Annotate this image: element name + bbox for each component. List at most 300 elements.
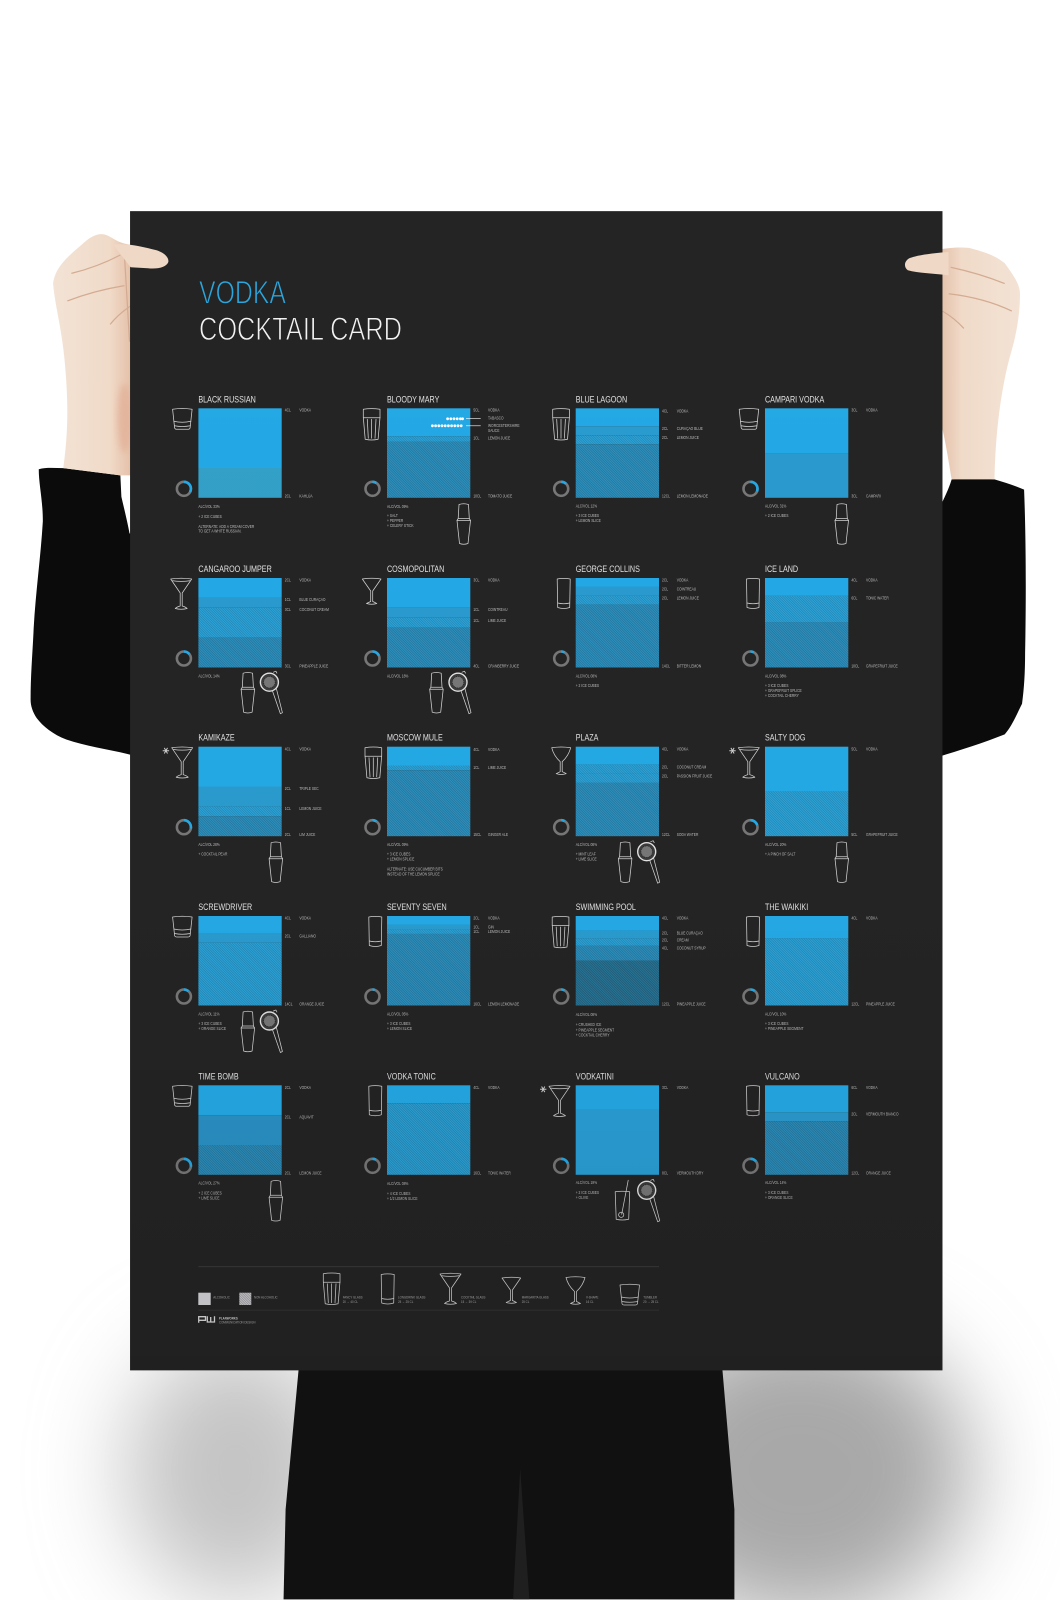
labels and notes: 6CL [851, 1084, 858, 1090]
labels and notes [576, 408, 708, 523]
labels and notes: 4CL [662, 915, 669, 921]
labels and notes: 14CL [285, 1001, 293, 1006]
labels and notes: CURAÇAO BLUE [677, 425, 703, 431]
labels and notes: 2CL [285, 577, 291, 582]
stacked chart [765, 916, 848, 1006]
labels and notes: 2CL [662, 937, 669, 943]
icon: cocktail glass [549, 1086, 570, 1117]
labels and notes: ALC/VOL 09% [387, 504, 409, 509]
labels and notes [576, 746, 712, 862]
labels and notes: VODKA [866, 746, 878, 751]
labels and notes [765, 746, 898, 857]
labels and notes: + 2 ICE CUBES [198, 1190, 222, 1195]
labels and notes: 4CL [473, 746, 480, 752]
labels and notes: ALTERNATE: ADD A CREAM COVER [198, 523, 254, 529]
left hand [53, 234, 135, 475]
labels and notes: VODKA [866, 577, 878, 582]
labels and notes: + 3 ICE CUBES [576, 513, 599, 518]
labels and notes: PINEAPPLE JUICE [677, 1001, 706, 1006]
labels and notes: + 3 ICE CUBES [765, 682, 789, 688]
labels and notes: LEMON JUICE [488, 928, 511, 934]
labels and notes: 4CL [662, 408, 669, 414]
card: Black Russian [173, 394, 313, 534]
labels and notes: TABASCO [488, 415, 504, 421]
labels and notes: 14CL [662, 663, 671, 668]
labels and notes: 12CL [662, 1001, 671, 1006]
labels and notes: LEMON JUICE [677, 435, 699, 440]
labels and notes: 12CL [851, 1170, 860, 1176]
alcohol ring [744, 820, 758, 834]
labels and notes: 2CL [285, 933, 291, 938]
labels and notes: LEMON LEMONADE [677, 493, 708, 499]
icon: longdrink glass [746, 578, 760, 608]
labels and notes: ALC/VOL 10% [765, 1011, 787, 1016]
icon: tumbler [173, 409, 192, 429]
labels and notes: 2CL [662, 595, 669, 600]
icon: fancy glass [363, 409, 380, 440]
card: Vodka Tonic [366, 1071, 511, 1201]
labels and notes: 10CL [473, 493, 482, 499]
labels and notes: 4CL [285, 915, 291, 921]
card: Plaza: PLAZA [576, 733, 599, 743]
labels and notes: 2CL [662, 586, 669, 591]
labels and notes: ALC/VOL 08% [387, 1181, 409, 1186]
alcohol ring [554, 820, 568, 834]
legend: v-shape glass: 16 CL [586, 1300, 594, 1304]
card: The Waikiki [744, 902, 895, 1031]
labels and notes: ALC/VOL 12% [576, 503, 597, 509]
logo: COMMUNICATION DESIGN [219, 1320, 256, 1325]
icon: fancy glass [552, 916, 569, 948]
labels and notes: 12CL [662, 831, 671, 837]
stacked chart [765, 578, 848, 668]
stacked chart [765, 408, 848, 498]
labels and notes: PINEAPPLE JUICE [866, 1001, 895, 1006]
labels and notes: ALTERNATE: USE CUCUMBER BITS [387, 866, 443, 872]
labels and notes: VODKA [488, 577, 500, 582]
card: Ice Land [744, 564, 898, 698]
labels and notes: ALC/VOL 28% [198, 841, 220, 847]
labels and notes: COCONUT CREAM [299, 606, 329, 612]
stacked chart [576, 408, 659, 498]
labels and notes: ORANGE JUICE [299, 1001, 324, 1006]
labels and notes: 2CL [285, 785, 291, 791]
labels and notes: + 3 ICE CUBES [198, 1020, 222, 1026]
legend: fancy glass [323, 1273, 363, 1304]
labels and notes: VERMOUTH BIANCO [866, 1111, 899, 1117]
legend: fancy glass: FANCY GLASS [343, 1295, 363, 1300]
labels and notes: + ORANGE SLICE [198, 1025, 226, 1031]
icon: mixing glass and spoon [615, 1180, 630, 1220]
labels and notes: 8CL [662, 1170, 669, 1176]
labels and notes: 1CL [285, 596, 291, 602]
labels and notes: VODKA [299, 407, 311, 413]
labels and notes: 4CL [285, 407, 291, 413]
card: Swimming Pool [552, 902, 706, 1038]
labels and notes: ALC/VOL 08% [765, 673, 787, 678]
legend: alcoholic swatch: ALCOHOLIC [213, 1295, 230, 1300]
labels and notes: VODKA [866, 915, 878, 921]
labels and notes: + PINEAPPLE SEGMENT [765, 1025, 804, 1031]
card: George Collins [554, 564, 701, 688]
stacked chart [198, 578, 282, 668]
labels and notes: VODKA [866, 407, 878, 413]
right sleeve [938, 477, 1026, 757]
labels and notes: GRAPEFRUIT JUICE [866, 831, 898, 837]
labels and notes: VODKA [299, 915, 311, 921]
labels and notes: VODKA [488, 915, 500, 921]
labels and notes: VODKA [299, 577, 311, 582]
labels and notes: 16CL [473, 1001, 482, 1006]
labels and notes: ALC/VOL 33% [198, 504, 220, 509]
labels and notes: 1CL [473, 764, 480, 770]
labels and notes: VODKA [677, 746, 689, 751]
icon: snowflake [729, 748, 736, 754]
labels and notes [765, 915, 895, 1031]
labels and notes: 2CL [662, 425, 669, 431]
labels and notes: TONIC WATER [866, 595, 889, 600]
icon: longdrink glass [369, 916, 382, 946]
alcohol ring [554, 990, 568, 1004]
labels and notes: + COCKTAIL PEAR [198, 851, 227, 857]
card: Cosmopolitan: COSMOPOLITAN [387, 564, 444, 574]
labels and notes [387, 407, 520, 528]
labels and notes: VODKA [299, 1084, 311, 1090]
card: Moscow Mule [365, 733, 508, 877]
labels and notes: INSTEAD OF THE LEMON SPLICE [387, 871, 440, 877]
labels and notes: + OLIVE [576, 1194, 589, 1200]
card: Vodka Tonic: VODKA TONIC [387, 1071, 436, 1082]
labels and notes: CAMPARI [866, 493, 881, 499]
labels and notes: + CRUSHED ICE [576, 1021, 602, 1027]
labels and notes: 4CL [285, 746, 291, 751]
title: COCKTAIL CARD [199, 311, 402, 347]
left sleeve [31, 468, 135, 756]
labels and notes: 2CL [662, 764, 669, 769]
icon: tumbler [173, 1086, 192, 1106]
left thumb [113, 244, 168, 269]
labels and notes: PINEAPPLE JUICE [299, 663, 329, 668]
card: Campari Vodka [739, 394, 881, 544]
card: Vulcano [744, 1071, 899, 1200]
labels and notes: ALC/VOL 08% [576, 1011, 597, 1017]
legend: non alcoholic swatch [239, 1293, 278, 1305]
labels and notes: ALC/VOL 19% [576, 1180, 597, 1185]
card: Black Russian: BLACK RUSSIAN [198, 394, 256, 405]
icon: longdrink glass [557, 578, 570, 608]
labels and notes: TO GET A WHITE RUSSIAN. [198, 528, 241, 534]
labels and notes: + PINEAPPLE SEGMENT [576, 1027, 615, 1032]
icon: longdrink glass [746, 1086, 760, 1116]
labels and notes: 2CL [662, 930, 669, 936]
labels and notes: LIM JUICE [299, 831, 316, 837]
labels and notes: 2CL [285, 831, 291, 837]
alcohol ring [177, 652, 191, 666]
labels and notes: VODKA [488, 1084, 500, 1090]
labels and notes: 1CL [473, 617, 480, 623]
labels and notes: VODKA [866, 1084, 878, 1090]
labels and notes: VODKA [677, 408, 689, 414]
labels and notes [387, 915, 520, 1031]
labels and notes: + 3 ICE CUBES [765, 1020, 789, 1026]
stacked chart [387, 578, 470, 668]
labels and notes: 2CL [285, 1170, 291, 1176]
labels and notes: + 3 ICE CUBES [387, 1020, 411, 1026]
card: Kamikaze [163, 733, 322, 882]
logo: PLANWORKS [219, 1316, 238, 1320]
card: Campari Vodka: CAMPARI VODKA [765, 394, 825, 405]
labels and notes: + 3 ICE CUBES [765, 1189, 789, 1195]
labels and notes: AQUAVIT [299, 1114, 314, 1119]
card: Screwdriver: SCREWDRIVER [198, 902, 252, 912]
legend: margarita glass [502, 1277, 549, 1304]
alcohol ring [366, 652, 380, 666]
labels and notes: COCONUT CREAM [677, 764, 706, 769]
labels and notes: VODKA [488, 407, 500, 413]
icon: margarita glass [362, 578, 381, 604]
labels and notes: GRAPEFRUIT JUICE [866, 663, 898, 668]
card: Salty Dog: SALTY DOG [765, 733, 805, 743]
alcohol ring [744, 652, 758, 666]
labels and notes [576, 577, 701, 688]
labels and notes [198, 577, 329, 678]
labels and notes [198, 915, 324, 1031]
stacked chart [765, 747, 848, 836]
icon: shaker [269, 842, 283, 882]
labels and notes: TOMATO JUICE [488, 493, 513, 499]
icon: shaker [241, 1011, 255, 1052]
labels and notes: ORANGE JUICE [866, 1170, 891, 1176]
drops: tabasco and worcestershire [431, 417, 481, 427]
labels and notes: + MINT LEAF [576, 851, 596, 857]
labels and notes: LEMON JUICE [299, 805, 322, 811]
labels and notes: 12CL [851, 1001, 860, 1006]
card: Ice Land: ICE LAND [765, 564, 798, 574]
labels and notes: + 4 ICE CUBES [387, 1190, 411, 1196]
labels and notes: LEMON JUICE [677, 595, 699, 600]
card: Bloody Mary [363, 394, 520, 544]
title [199, 274, 402, 347]
labels and notes: SODA WATER [677, 831, 698, 837]
legend: v-shape glass: V-SHAPE [586, 1295, 599, 1300]
labels and notes: 5CL [851, 746, 858, 751]
stacked chart [576, 747, 659, 836]
labels and notes: LEMON JUICE [299, 1170, 322, 1176]
alcohol ring [366, 482, 380, 496]
poster [130, 211, 942, 1370]
labels and notes: ALC/VOL 31% [765, 503, 787, 509]
labels and notes: COINTREAU [677, 586, 696, 591]
card: Bloody Mary: BLOODY MARY [387, 394, 440, 405]
labels and notes: TONIC WATER [488, 1170, 511, 1176]
alcohol ring [177, 482, 191, 496]
labels and notes: 12CL [662, 493, 671, 499]
alcohol ring [177, 1159, 191, 1173]
labels and notes: 1CL [285, 805, 291, 811]
right thumb [905, 252, 949, 275]
legend: cocktail glass [440, 1273, 486, 1304]
labels and notes: BLUE CURAÇAO [299, 596, 325, 602]
icon: snowflake [163, 748, 169, 754]
alcohol ring [177, 990, 191, 1004]
labels and notes: GALLIANO [299, 933, 316, 938]
labels and notes [765, 1084, 899, 1200]
card: Cangaroo Jumper [171, 564, 329, 714]
labels and notes: ALC/VOL 14% [765, 1180, 787, 1185]
stacked chart [198, 916, 282, 1006]
alcohol ring [366, 820, 380, 834]
card: Seventy Seven [366, 902, 520, 1031]
card: Swimming Pool: SWIMMING POOL [576, 902, 636, 912]
alcohol ring [744, 990, 758, 1004]
labels and notes: ALC/VOL 18% [387, 673, 409, 678]
icon: shaker [241, 672, 255, 713]
labels and notes: + 2 ICE CUBES [576, 682, 599, 688]
labels and notes: CRANBERRY JUICE [488, 663, 519, 668]
icon: shaker [835, 504, 848, 544]
labels and notes: 3CL [473, 577, 480, 582]
labels and notes [387, 1084, 511, 1201]
labels and notes: 15CL [473, 831, 482, 837]
labels and notes: LEMON LEMONADE [488, 1001, 520, 1006]
icon: cocktail glass [738, 747, 759, 778]
labels and notes: + SALT [387, 513, 398, 518]
icon: snowflake [540, 1086, 546, 1092]
icon: longdrink glass [746, 916, 760, 946]
labels and notes: 2CL [473, 915, 480, 921]
labels and notes: + CELERY STICK [387, 523, 414, 528]
labels and notes: + ORANGE SLICE [765, 1194, 793, 1200]
labels and notes [198, 407, 313, 534]
labels and notes: BLUE CURAÇAO [677, 930, 703, 936]
labels and notes: GINGER ALE [488, 831, 508, 837]
alcohol ring [554, 652, 568, 666]
labels and notes: 10CL [851, 663, 860, 668]
card: The Waikiki: THE WAIKIKI [765, 902, 808, 912]
icon: strainer [449, 671, 471, 714]
labels and notes: ALC/VOL 09% [387, 841, 409, 847]
stacked chart [198, 1085, 282, 1175]
legend: tumbler: 20 → 25 CL [643, 1300, 659, 1304]
alcohol ring [554, 1159, 568, 1173]
labels and notes [387, 746, 508, 877]
alcohol ring [366, 990, 380, 1004]
legend: alcoholic swatch [198, 1293, 230, 1305]
card: Cosmopolitan [362, 564, 519, 714]
labels and notes: 4CL [851, 577, 858, 582]
labels and notes: BITTER LEMON [677, 663, 701, 668]
icon: cocktail glass [172, 747, 193, 778]
card: Vodkatini [540, 1071, 704, 1222]
alcohol ring [554, 482, 568, 496]
labels and notes: + LEMON SLICE [576, 518, 601, 523]
icon: cocktail glass [171, 578, 192, 609]
card: Vodkatini: VODKATINI [576, 1071, 614, 1082]
stacked chart [198, 408, 282, 498]
legend: cocktail glass: COCKTAIL GLASS [461, 1295, 486, 1300]
card: Time Bomb [173, 1071, 322, 1221]
floor shadows [125, 1320, 970, 1600]
card: Blue Lagoon [553, 394, 708, 523]
icon: strainer [638, 841, 660, 883]
labels and notes: + LIME SLICE [576, 856, 597, 862]
legend: v-shape glass [566, 1277, 599, 1304]
labels and notes: SAUCE [488, 427, 500, 433]
labels and notes: VODKA [677, 1084, 689, 1090]
legend: tumbler: TUMBLER [643, 1295, 657, 1300]
labels and notes: 4CL [473, 663, 480, 668]
labels and notes: 3CL [851, 407, 858, 413]
card: Seventy Seven: SEVENTY SEVEN [387, 902, 447, 912]
labels and notes: 4CL [851, 915, 858, 921]
card: Plaza [552, 733, 712, 883]
alcohol ring [744, 482, 758, 496]
icon: tumbler [173, 916, 192, 937]
icon: tumbler [739, 409, 759, 429]
card: Kamikaze: KAMIKAZE [198, 733, 235, 743]
icon: strainer [260, 671, 282, 714]
labels and notes: LIME JUICE [488, 617, 506, 623]
labels and notes: 2CL [851, 1111, 858, 1117]
alcohol ring [177, 820, 191, 834]
card: Vulcano: VULCANO [765, 1071, 800, 1082]
labels and notes: ALC/VOL 14% [198, 673, 220, 678]
labels and notes: ALC/VOL 20% [765, 841, 787, 847]
icon: shaker [430, 672, 443, 713]
labels and notes [576, 915, 706, 1038]
labels and notes: 4CL [473, 1084, 480, 1090]
card: George Collins: GEORGE COLLINS [576, 564, 640, 574]
labels and notes: 5CL [851, 831, 858, 837]
labels and notes: 1CL [473, 435, 480, 441]
legend: margarita glass: 25 CL [522, 1300, 529, 1304]
labels and notes: TRIPLE SEC [299, 785, 319, 791]
labels and notes: 4CL [662, 746, 669, 751]
stacked chart [387, 916, 470, 1006]
legend: cocktail glass: 15 → 39 CL [461, 1300, 476, 1304]
icon: shaker [269, 1181, 283, 1221]
trousers [284, 1367, 734, 1599]
labels and notes: 2CL [285, 1114, 291, 1119]
icon: strainer [260, 1010, 282, 1052]
right hand [936, 247, 1020, 479]
labels and notes [576, 1084, 704, 1200]
poster vignette [130, 211, 942, 1370]
legend: non alcoholic swatch: NON ALCOHOLIC [254, 1295, 278, 1300]
stacked chart [387, 747, 470, 836]
labels and notes: + 1/2 LEMON SLICE [387, 1195, 418, 1201]
labels and notes: VODKA [677, 915, 689, 921]
labels and notes: + LIME SLICE [198, 1195, 220, 1200]
labels and notes: 4CL [662, 945, 669, 951]
labels and notes: + 2 ICE CUBES [198, 513, 222, 519]
labels and notes: + PEPPER [387, 518, 403, 523]
labels and notes: VODKA [677, 577, 689, 582]
title: VODKA [199, 274, 286, 310]
card: Time Bomb: TIME BOMB [198, 1071, 239, 1082]
labels and notes: 16CL [473, 1170, 482, 1176]
labels and notes: LIME JUICE [488, 764, 506, 770]
labels and notes: 1CL [473, 928, 480, 934]
labels and notes: KAHLÚA [299, 493, 313, 499]
legend: longdrink glass: 25 → 25 CL [398, 1300, 413, 1304]
labels and notes: 1CL [473, 607, 480, 612]
stacked chart [198, 747, 282, 836]
labels and notes: + 2 ICE CUBES [765, 513, 789, 518]
legend [198, 1266, 659, 1310]
labels and notes: 2CL [285, 1084, 291, 1090]
labels and notes: VODKA [299, 746, 311, 751]
